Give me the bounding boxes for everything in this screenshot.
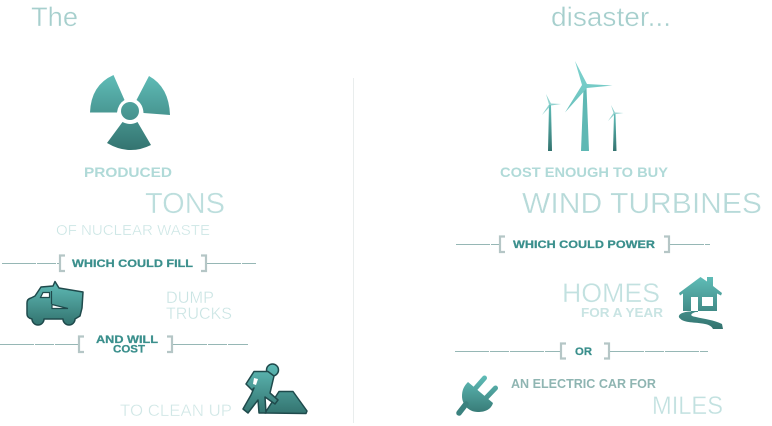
divider: and will cost: COST (113, 344, 145, 356)
divider: or (455, 344, 708, 358)
divider: and will cost (0, 334, 248, 356)
icon: radiation (90, 75, 170, 150)
divider: or: OR (575, 346, 592, 358)
label: to clean up: TO CLEAN UP (120, 402, 232, 420)
title left: The (31, 2, 78, 32)
panel: nuclear waste (0, 75, 307, 420)
label: homes: HOMES (562, 278, 660, 308)
divider: which could power: WHICH COULD POWER (513, 239, 655, 251)
divider: which could fill: WHICH COULD FILL (72, 258, 193, 270)
divider: which could power (456, 236, 710, 252)
label: miles: MILES (652, 392, 723, 420)
panel: wind turbines (455, 61, 762, 420)
label: dump trucks: DUMP (166, 289, 214, 307)
label: an electric car for: AN ELECTRIC CAR FOR (511, 377, 656, 391)
label: tons: TONS (145, 188, 225, 220)
label: dump trucks: TRUCKS (166, 305, 232, 323)
icon: wind turbines (542, 61, 624, 151)
title right: disaster... (551, 2, 671, 32)
label: cost enough to buy: COST ENOUGH TO BUY (500, 164, 669, 180)
icon: house (679, 277, 723, 329)
label: of nuclear waste: OF NUCLEAR WASTE (56, 223, 210, 239)
label: wind turbines: WIND TURBINES (522, 188, 762, 220)
divider: which could fill (2, 256, 256, 271)
label: produced: PRODUCED (84, 164, 172, 180)
divider: and will cost: AND WILL (96, 334, 158, 346)
label: dump trucks (166, 289, 232, 323)
label: for a year: FOR A YEAR (581, 305, 664, 320)
icon: dump truck (27, 282, 83, 325)
icon: electric plug (459, 378, 496, 413)
icon: worker shovelling (243, 364, 307, 414)
